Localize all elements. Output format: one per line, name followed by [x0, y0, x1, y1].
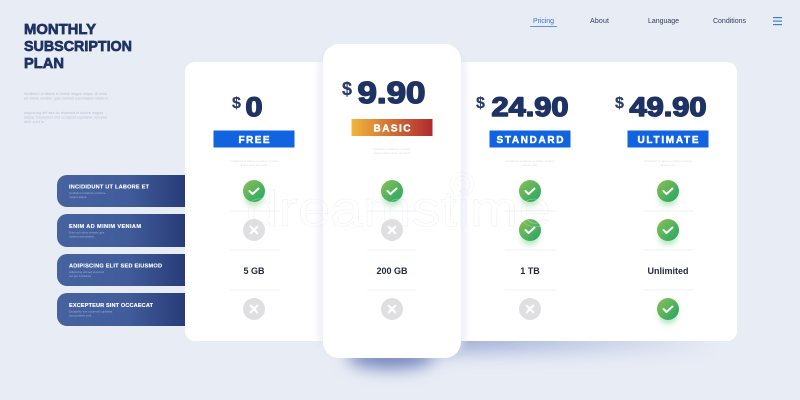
plan: free: Incididunt ut labore et dolore magna [230, 159, 278, 163]
plan: standard: Incididunt ut labore et dolore magna [506, 159, 554, 163]
intro text [24, 92, 108, 124]
plan: free: FREE [238, 135, 270, 146]
feature label 3: tempor incididunt [69, 274, 91, 278]
plan: standard: 24.90 [492, 92, 568, 122]
plan: basic highlighted card: Incididunt ut labore et dolore [373, 147, 411, 151]
plan: standard: 1 TB [520, 266, 540, 276]
plan: ultimate: 49.90 [630, 92, 706, 122]
panel: pricing table [185, 62, 737, 341]
navigation: About [590, 18, 609, 25]
title: SUBSCRIPTION [24, 38, 132, 55]
card shadow [347, 326, 720, 369]
feature label 4: Excepteur sint occaecat cupidatat [69, 310, 112, 314]
plan: free [214, 92, 294, 320]
intro text: Adipiscing elit sed do eiusmod et dolore magna [24, 111, 103, 115]
navigation: Pricing [533, 18, 554, 25]
plan: basic highlighted card: 200 GB [376, 266, 408, 276]
plan: ultimate [615, 92, 708, 324]
feature label 3: ADIPISCING ELIT SED EIUSMOD [69, 264, 162, 270]
plan: free: 0 [246, 92, 262, 122]
feature label 1: magna aliqua [69, 195, 87, 199]
feature label 2: Enim ad minim veniam quis [69, 230, 105, 234]
plan: standard: $ [476, 95, 485, 112]
feature label 1 [57, 175, 185, 207]
plan: basic highlighted card: magna aliqua enim ad minim [373, 151, 412, 155]
title: MONTHLY [24, 21, 96, 38]
navigation: Conditions [713, 18, 746, 25]
icon: menu [773, 17, 782, 25]
plan: standard: STANDARD [496, 135, 564, 146]
plan: ultimate: ULTIMATE [638, 135, 699, 146]
feature label 1: INCIDIDUNT UT LABORE ET [69, 184, 150, 190]
navigation: Language [648, 18, 679, 25]
plan: basic highlighted card [318, 44, 466, 358]
feature label 2 [57, 214, 185, 247]
plan: free: $ [232, 95, 241, 112]
feature label 1: Incididunt ut labore et dolore [69, 191, 106, 195]
navigation [530, 18, 746, 27]
plan: ultimate: $ [615, 95, 624, 112]
plan: ultimate: Incididunt ut labore et dolore magna [644, 159, 692, 163]
intro text: dent sunt in [24, 120, 44, 124]
intro text: aliqua. Excepteur sint occaecat cupidatat non proi [24, 116, 107, 120]
plan: ultimate: aliqua enim [660, 163, 676, 167]
feature labels [57, 175, 185, 326]
feature label 2: ENIM AD MINIM VENIAM [69, 224, 141, 230]
feature label 4 [57, 293, 185, 326]
plan: standard [476, 92, 570, 320]
plan: free: 5 GB [243, 266, 265, 276]
intro text: ad minim veniam, quis nostrud exercitation ullamco [24, 96, 108, 100]
watermark: dreamstime [246, 181, 551, 237]
feature label 3: Adipiscing elit sed eiusmod [69, 270, 104, 274]
title: PLAN [24, 55, 64, 72]
feature label 3 [57, 254, 185, 286]
plan: basic highlighted card: $ [342, 79, 352, 99]
plan: ultimate: Unlimited [647, 266, 689, 276]
plan: basic highlighted card: BASIC [374, 124, 410, 134]
plan: standard: aliqua enim [522, 163, 538, 167]
feature label 4: EXCEPTEUR SINT OCCAECAT [69, 303, 154, 309]
feature label 4: non proident sunt [69, 314, 92, 318]
intro text: Incididunt ut labore et dolore magna aliqua. Ut enim [24, 92, 107, 96]
title [24, 21, 132, 72]
feature label 2: nostrud exercitation [69, 234, 95, 238]
plan: free: aliqua enim ad minim [240, 163, 269, 167]
plan: basic highlighted card: 9.90 [358, 75, 426, 110]
